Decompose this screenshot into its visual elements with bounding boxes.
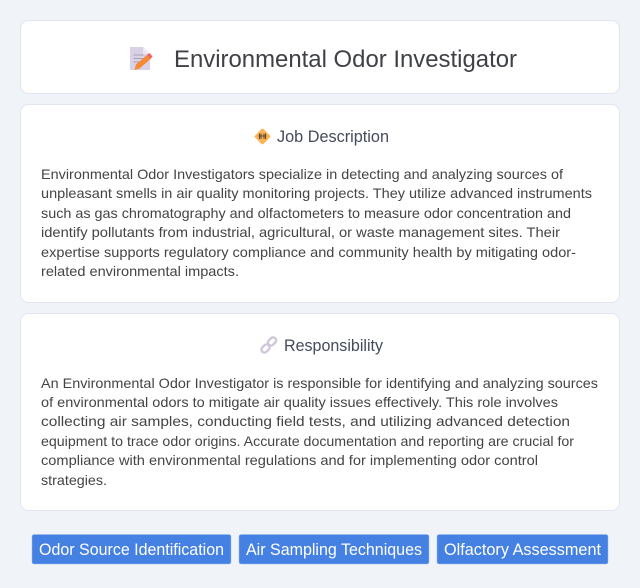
text block: job description: such as gas chromatography and olfactometers to measure odor concentration and — [41, 205, 571, 221]
tag: air sampling techniques: Air Sampling Techniques — [246, 541, 422, 559]
tag: olfactory assessment: Olfactory Assessment — [444, 541, 601, 559]
text block: responsibility: compliance with environmental regulations and for implementing odor control — [41, 452, 538, 468]
icon: document with pencil — [130, 47, 152, 70]
text block: job description: Environmental Odor Investigators specialize in detecting and analyzing sources of — [41, 166, 563, 182]
text block: job description: identify pollutants from industrial, agricultural, or waste management sites. Their — [41, 224, 560, 240]
heading: job description: Job Description — [277, 128, 389, 146]
tag: odor source identification: Odor Source Identification — [39, 541, 224, 559]
text block: responsibility: strategies. — [41, 472, 107, 488]
tag: air sampling techniques — [239, 534, 429, 564]
text block: responsibility: of environmental odors to mitigate air quality issues effectively. This role involves — [41, 394, 558, 410]
tag: olfactory assessment — [437, 534, 608, 564]
text block: responsibility: collecting air samples, conducting field tests, and utilizing advanced detection — [41, 413, 570, 429]
icon: orange diamond — [254, 128, 271, 145]
text block: responsibility: An Environmental Odor Investigator is responsible for identifying and analyzing sources — [41, 375, 598, 391]
icon: chain link — [260, 336, 277, 354]
text block: responsibility — [41, 375, 598, 488]
text block: job description — [41, 166, 592, 279]
title: Environmental Odor Investigator — [174, 46, 517, 73]
panel: title header — [20, 20, 620, 94]
tag: odor source identification — [32, 534, 231, 564]
panel: responsibility — [20, 314, 620, 510]
text block: job description: unpleasant smells in air quality monitoring projects. They utilize advanced instruments — [41, 185, 592, 201]
text block: responsibility: equipment to trace odor origins. Accurate documentation and reporting are crucial for — [41, 433, 574, 449]
heading: responsibility: Responsibility — [284, 337, 384, 355]
text block: job description: expertise supports regulatory compliance and community health by mitigating odor- — [41, 244, 576, 260]
text block: job description: related environmental impacts. — [41, 263, 239, 279]
panel: job description — [20, 104, 620, 302]
